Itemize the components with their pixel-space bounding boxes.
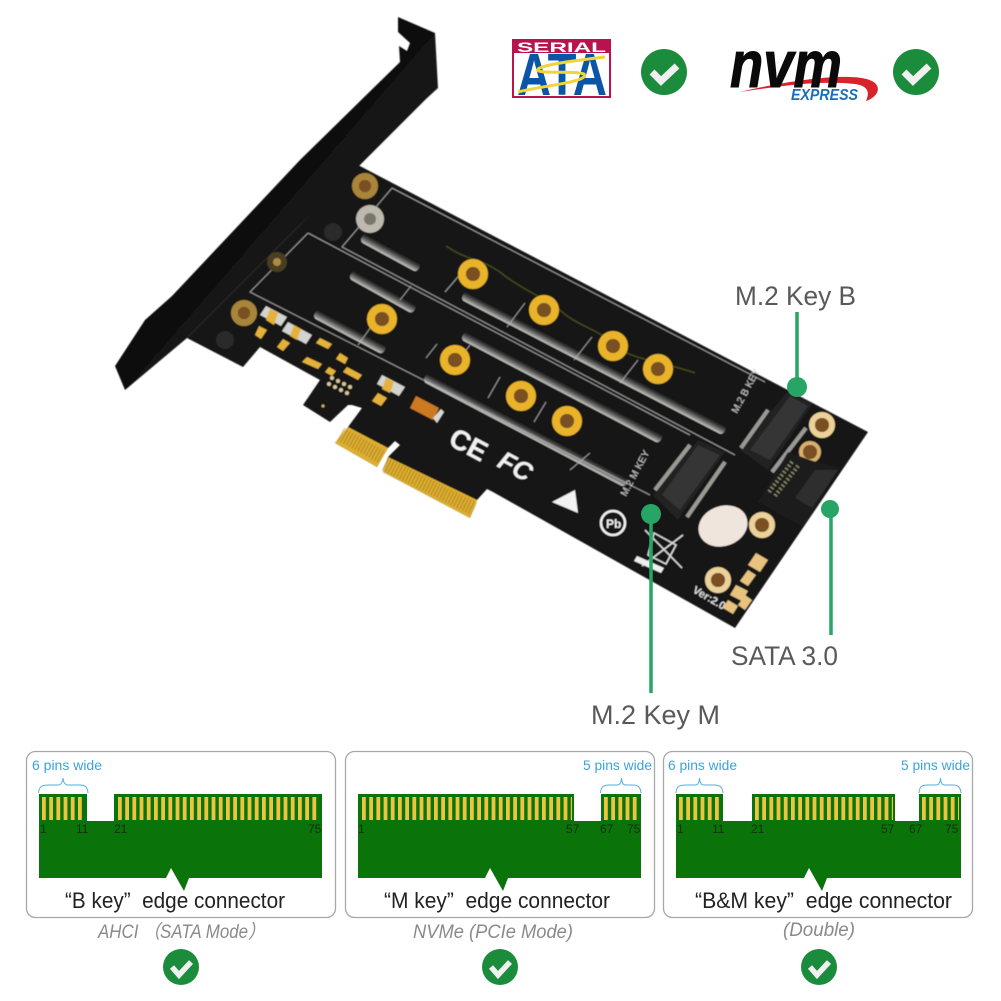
connector diagram: [676, 794, 961, 891]
pin numbers: 1: [677, 822, 684, 836]
pin numbers: 67: [600, 822, 614, 836]
M.2 key M socket: [653, 440, 725, 520]
callout: M.2 Key M: M.2 Key M: [591, 700, 720, 730]
gold edge fingers: [335, 427, 477, 518]
callout: SATA 3.0: [731, 500, 839, 671]
callout: SATA 3.0: SATA 3.0: [731, 641, 838, 671]
metal bracket: [115, 17, 438, 390]
pin numbers: 21: [751, 822, 765, 836]
CE mark: CE: [444, 422, 493, 468]
M.2 B KEY label: M.2 B KEY: [730, 367, 763, 415]
icon: check AHCI: [163, 949, 199, 985]
M.2 key B socket: [740, 392, 813, 472]
board markings: [444, 367, 763, 613]
pin numbers: 75: [945, 822, 959, 836]
brace label: 5 pins wide: [583, 757, 652, 773]
ESD warning triangle: [552, 490, 578, 513]
pin numbers: 1: [40, 822, 47, 836]
M.2 M KEY label: M.2 M KEY: [619, 448, 653, 498]
brace label: [32, 757, 102, 793]
standoffs and screws: [216, 205, 384, 349]
callout: M.2 Key M: [591, 504, 720, 730]
pin numbers: 75: [308, 822, 322, 836]
pin numbers: 57: [566, 822, 580, 836]
connector diagram: [39, 794, 322, 891]
caption: “B key” edge connector: [65, 888, 285, 913]
pin numbers: [677, 822, 959, 836]
icon: check SATA: [641, 49, 687, 95]
power pads: [723, 553, 768, 614]
mode label: NVMe: NVMe (PCIe Mode): [413, 922, 573, 943]
FCC mark: FC: [493, 447, 538, 488]
silkscreen module outlines: [250, 188, 765, 495]
QC passed sticker: [693, 499, 753, 553]
panel: B key: [26, 752, 336, 918]
SATA connector: [758, 452, 840, 527]
brace labels: 6 pins wide: [668, 757, 737, 773]
pin numbers: 67: [909, 822, 923, 836]
pin numbers: 75: [627, 822, 641, 836]
panel: B&M key: [664, 752, 972, 918]
callout: M.2 Key B: M.2 Key B: [735, 281, 856, 311]
connector diagram: [358, 794, 641, 891]
card slots: [313, 233, 727, 487]
olive trace: [446, 246, 695, 373]
logo: NVM Express: EXPRESS: [791, 87, 858, 104]
pin numbers: 11: [712, 822, 725, 836]
pin numbers: 1: [358, 822, 365, 836]
caption: “B&M key” edge connector: [695, 888, 952, 913]
mounting pads: [234, 176, 832, 590]
icon: check NVMe mode: [482, 949, 518, 985]
pin numbers: [40, 822, 322, 836]
panel: M key: [346, 752, 654, 918]
mode label: Double: (Double): [783, 920, 855, 941]
pin numbers: 11: [76, 822, 89, 836]
pin numbers: [358, 822, 641, 836]
pin numbers: 57: [881, 822, 895, 836]
logo: Serial ATA: SERIAL: [517, 39, 607, 55]
icon: check Double: [801, 949, 837, 985]
logo: NVM Express: nvm: [730, 27, 842, 101]
PCIe adapter card photo: [115, 17, 868, 628]
caption: “M key” edge connector: [384, 888, 610, 913]
Pb-free mark: Pb: [606, 517, 621, 531]
mode label: AHCI: AHCI （SATA Mode）: [97, 921, 265, 943]
brace labels: 5 pins wide: [901, 757, 970, 773]
icon: check NVMe: [893, 49, 939, 95]
brace label: 6 pins wide: [32, 757, 102, 773]
brace label: [583, 757, 652, 793]
callout: M.2 Key B: [735, 281, 856, 397]
logo: Serial ATA: ATA: [517, 42, 607, 108]
circuit board: [187, 165, 868, 628]
WEEE bin mark: [634, 530, 683, 573]
Pb-free mark: [601, 511, 625, 535]
version label: Ver:2.0: [690, 584, 728, 613]
surface mount pads: [255, 306, 444, 423]
pin numbers: 21: [114, 822, 128, 836]
brace labels: [668, 757, 970, 793]
